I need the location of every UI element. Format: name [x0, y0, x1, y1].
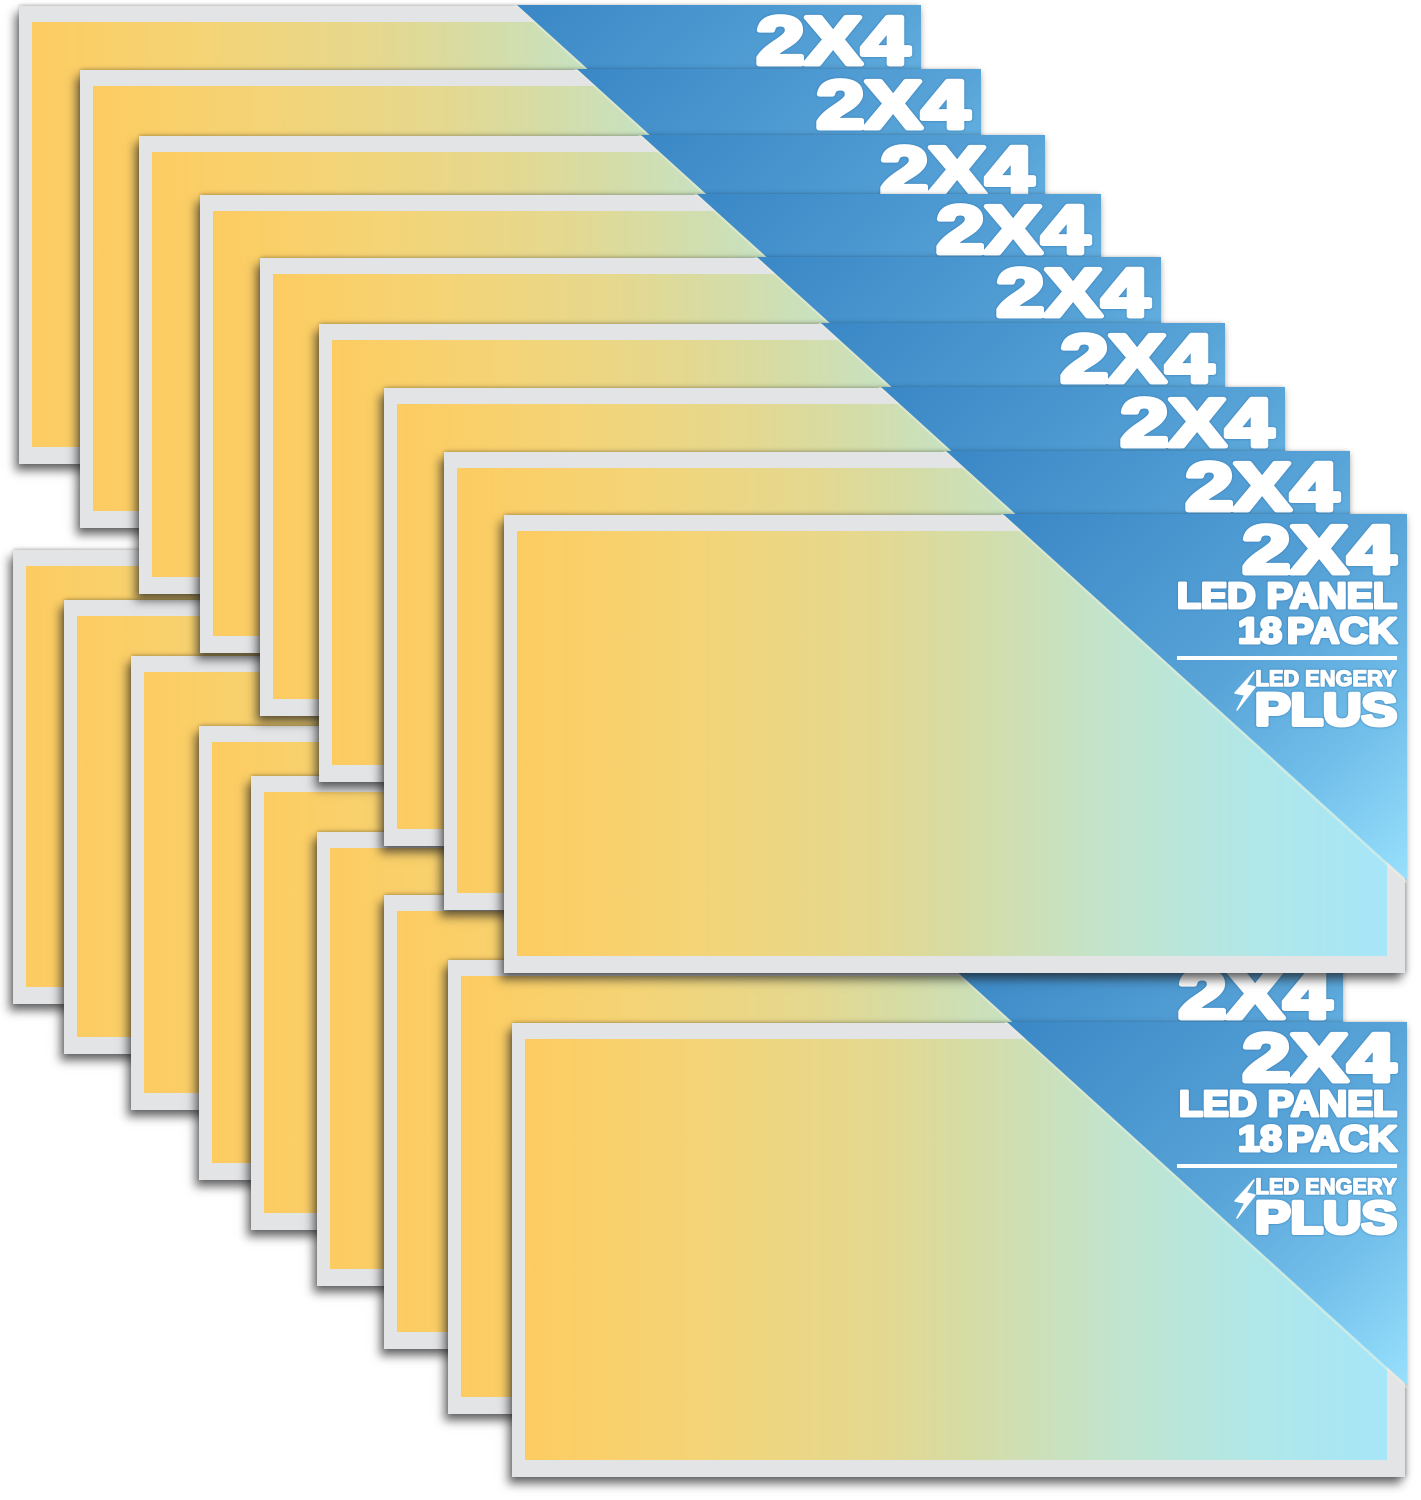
text: 18 PACK [1238, 1118, 1397, 1159]
panel: back row 1 [13, 550, 906, 1004]
corner banner: front row 2 [574, 67, 981, 143]
panel: back row 6 [317, 832, 1210, 1286]
corner banner: back row 8 [958, 957, 1343, 1033]
panel: front row 3 [139, 136, 1043, 594]
icon: lightning bolt [1235, 1180, 1255, 1218]
panel: back row 5 [251, 776, 1144, 1230]
light surface: upper front panel [517, 531, 1387, 956]
text: LED ENGERY: LED ENGERY [1256, 666, 1397, 691]
heading: 2X4: 2X4 [1242, 1020, 1396, 1096]
corner banner: front row 4: 2X4 [936, 192, 1090, 268]
corner banner: front row 3: 2X4 [880, 133, 1034, 209]
corner banner: front row 6: 2X4 [1060, 321, 1214, 397]
text: LED PANEL: LED PANEL [1179, 1083, 1397, 1124]
panel: front row 8 [444, 452, 1348, 910]
heading: 2X4: 2X4 [1242, 512, 1396, 588]
text: PLUS: PLUS [1255, 1192, 1397, 1243]
corner banner: front row 1: 2X4 [756, 3, 910, 79]
corner banner: front row 2: 2X4 [816, 67, 970, 143]
text: LED PANEL: LED PANEL [1177, 575, 1397, 616]
corner banner: front row 8: 2X4 [1186, 449, 1339, 525]
corner banner: lower front panel [1004, 1020, 1407, 1389]
corner banner: front row 7: 2X4 [1120, 385, 1274, 461]
panel: back row 7 [384, 895, 1277, 1349]
text: 18 PACK: 18 [1238, 610, 1282, 651]
corner banner: front row 6 [818, 321, 1225, 397]
corner banner: front row 3 [638, 133, 1045, 209]
panel: front row 7 [384, 388, 1283, 846]
panel: front row 1 [19, 6, 919, 464]
corner banner: front row 5: 2X4 [996, 255, 1150, 331]
corner banner: back row 8: 2X4 [1178, 957, 1332, 1033]
panel: front upper with full label [504, 515, 1405, 973]
panel: back row 3 [131, 656, 1024, 1110]
panel: front row 5 [260, 258, 1159, 716]
panel: front lower with full label [512, 1023, 1405, 1477]
panel: back row 8 [448, 960, 1341, 1414]
icon: lightning bolt [1235, 672, 1255, 710]
panel: front row 2 [80, 70, 979, 528]
panel: front row 6 [319, 324, 1223, 782]
panel: back row 2 [64, 600, 957, 1054]
corner banner: front row 1 [514, 3, 921, 79]
light surface: lower front panel [525, 1039, 1387, 1460]
corner banner: front row 8 [943, 449, 1350, 525]
text: PLUS: PLUS [1255, 684, 1397, 735]
text: LED ENGERY: LED ENGERY [1256, 1174, 1397, 1199]
text: 18 PACK [1238, 610, 1397, 651]
text: 18 PACK: PACK [1287, 610, 1397, 651]
corner banner: upper front panel [1000, 512, 1407, 884]
corner banner: front row 5 [754, 255, 1161, 331]
text: 18 PACK: PACK [1287, 1118, 1397, 1159]
text: 18 PACK: 18 [1238, 1118, 1282, 1159]
panel: back row 4 [199, 726, 1092, 1180]
panel: front row 4 [200, 195, 1099, 653]
corner banner: front row 4 [694, 192, 1101, 268]
corner banner: front row 7 [878, 385, 1285, 461]
